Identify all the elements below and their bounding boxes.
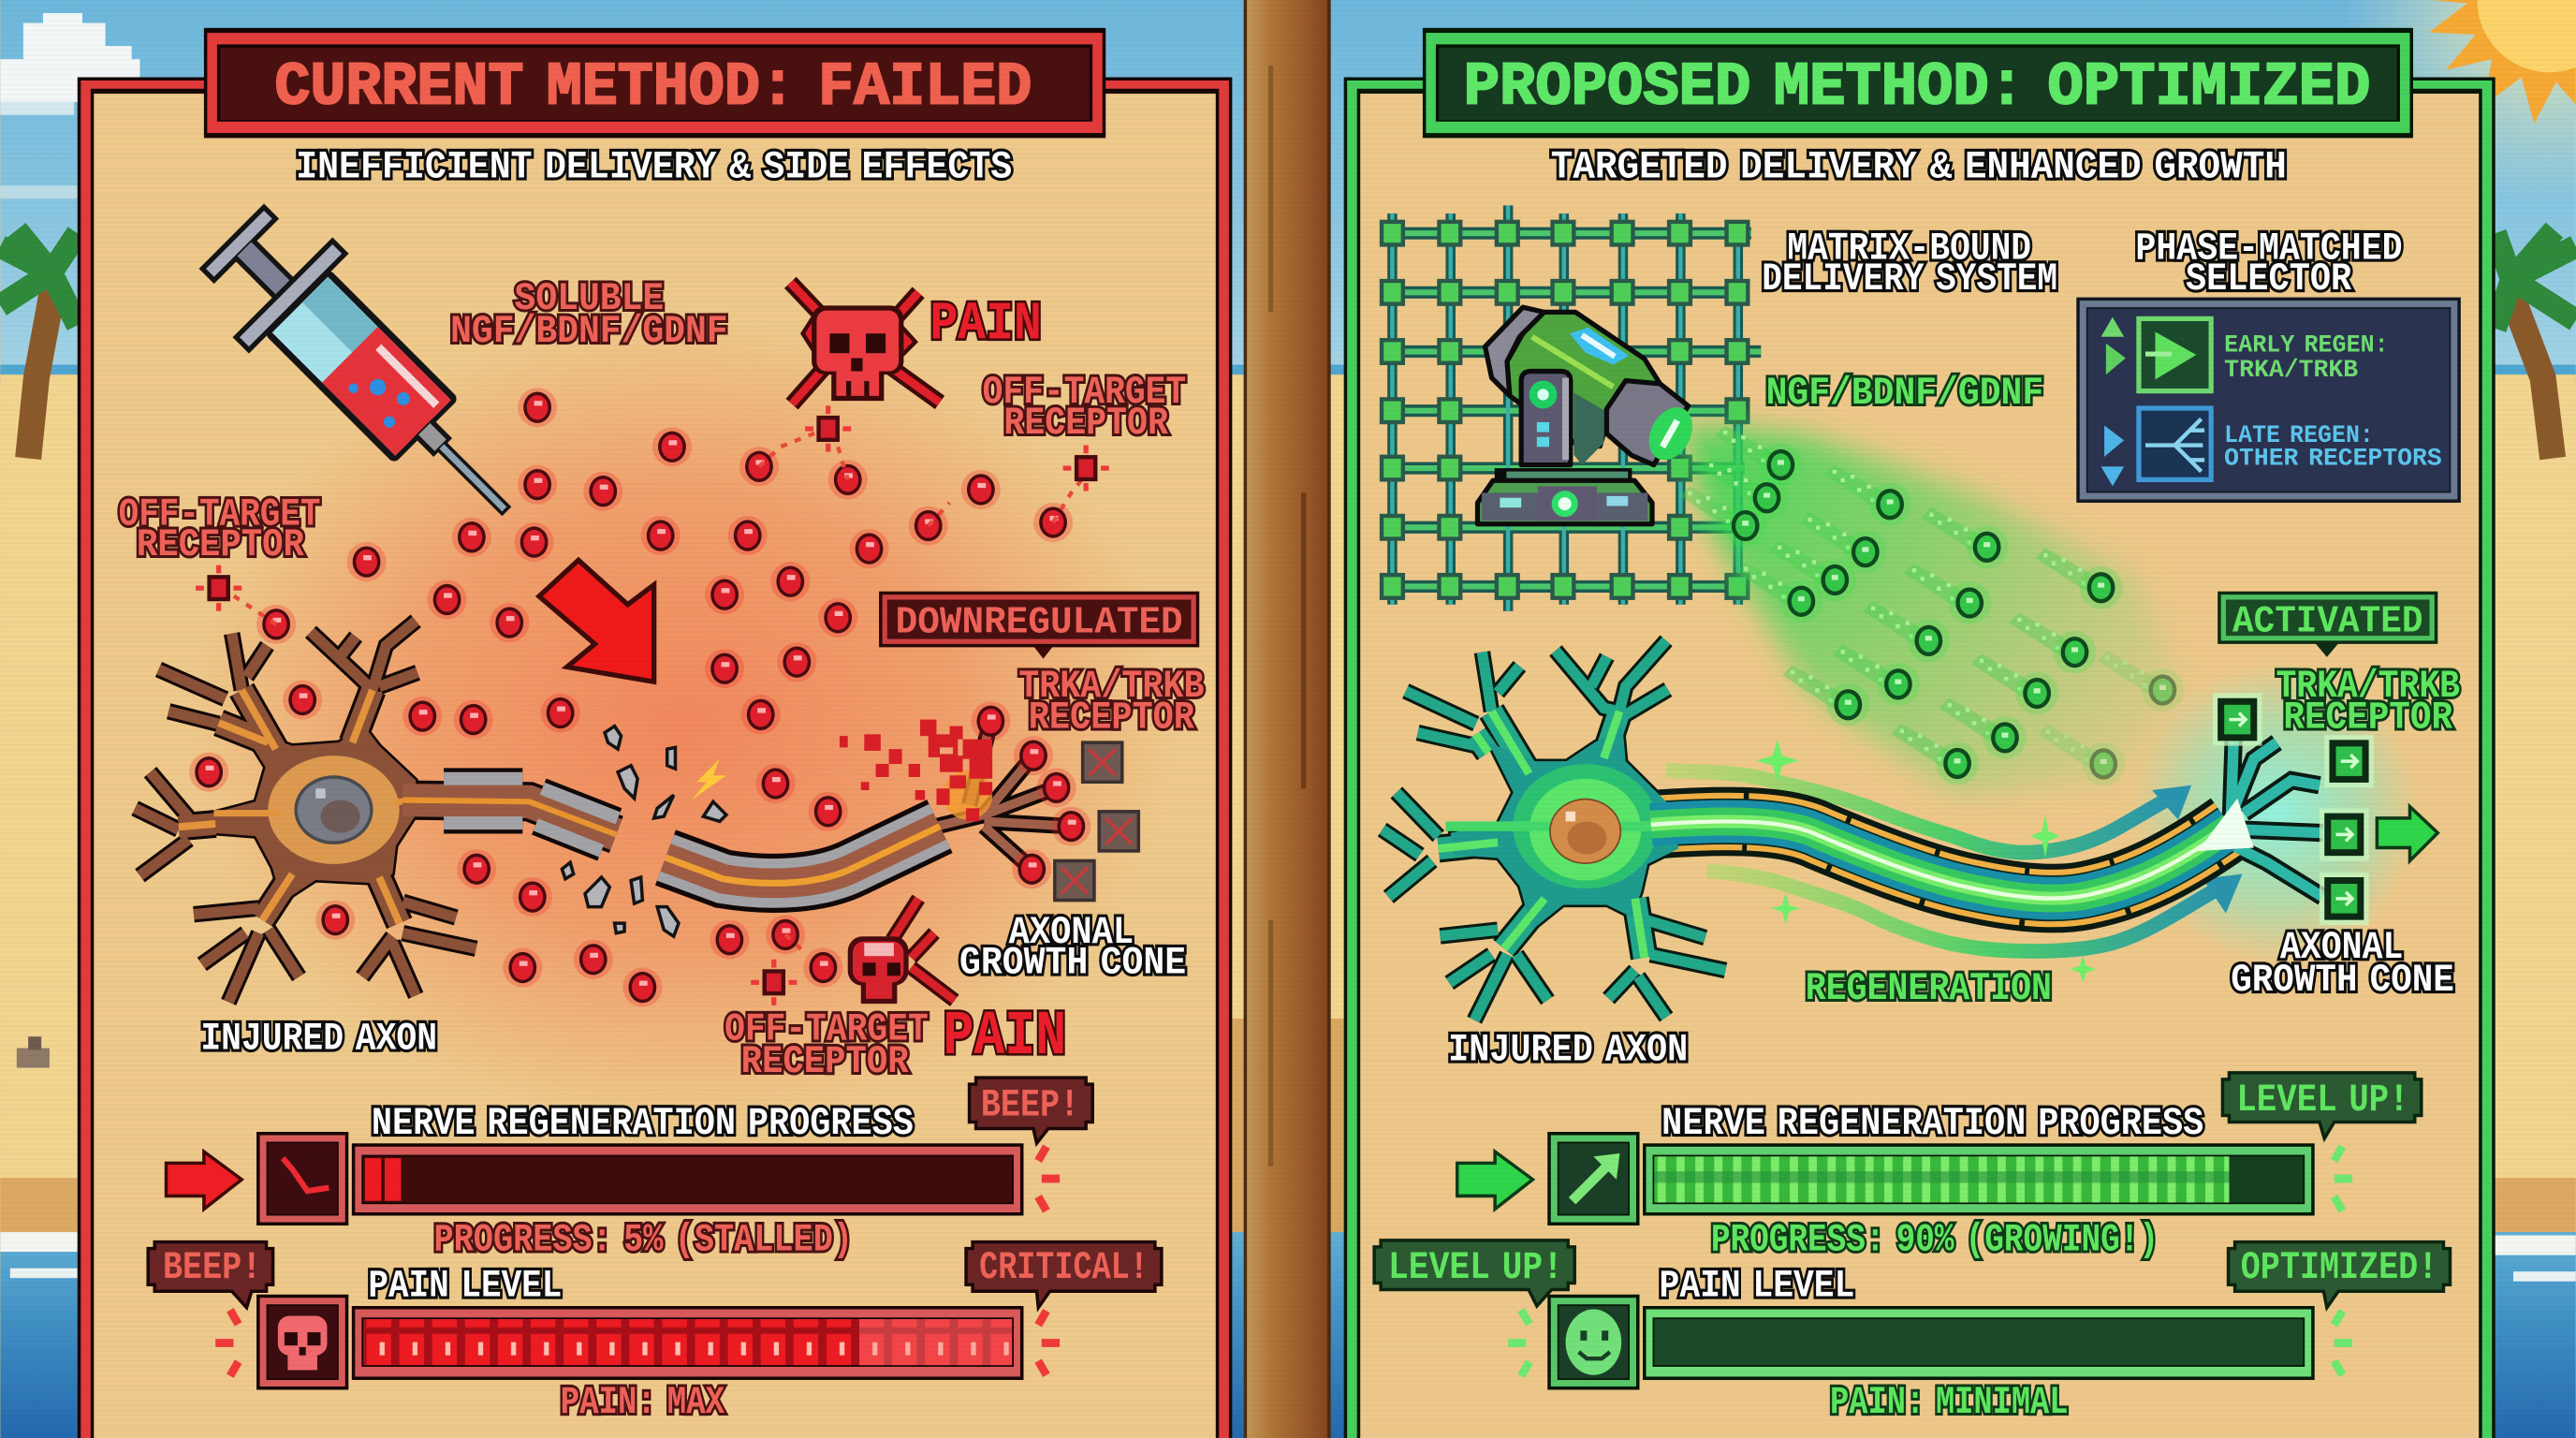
label: off-target receptor left	[119, 492, 320, 567]
cannon barrel	[1507, 312, 1660, 447]
callout: activated: ACTIVATED	[2232, 601, 2423, 644]
palm tree left	[0, 230, 78, 459]
palm tree right	[2496, 230, 2576, 459]
callout: critical	[966, 1242, 1162, 1308]
label: off-target receptor upper right: RECEPTOR	[1003, 401, 1169, 446]
callout: level up left: LEVEL UP!	[1388, 1245, 1563, 1290]
panel: current method	[78, 77, 1232, 1438]
label: off-target receptor bottom	[724, 1007, 929, 1084]
icon: syringe	[182, 186, 557, 562]
callout: level up upper: LEVEL UP!	[2236, 1078, 2409, 1123]
heading: PAIN LEVEL	[1660, 1263, 1854, 1308]
neuron: injured, left panel	[135, 621, 1071, 1002]
icon box	[1547, 1132, 1640, 1225]
label: off-target receptor upper right: OFF-TARGET	[983, 370, 1186, 415]
alert sparks progress bar	[1034, 1144, 1060, 1213]
glow at growth cone	[2130, 662, 2420, 964]
progress bar 5 percent	[352, 1143, 1023, 1215]
icon: skull with lightning	[790, 283, 940, 404]
green factor particles	[1680, 425, 2184, 785]
callout: downregulated: DOWNREGULATED	[896, 602, 1183, 645]
subtitle right: TARGETED DELIVERY & ENHANCED GROWTH	[1551, 145, 2287, 190]
status text: PAIN: MAX	[561, 1380, 725, 1425]
icon box skull	[256, 1295, 348, 1389]
matrix scaffold grid	[1380, 205, 1761, 611]
late regen control: LATE REGEN:	[2224, 421, 2374, 450]
red splatter at damaged growth cone	[840, 720, 992, 821]
icon: matrix delivery cannon	[1477, 307, 1701, 524]
off-target receptors with dashed trails	[196, 405, 1109, 1005]
icon box	[256, 1132, 348, 1225]
alert sparks pain bar	[215, 1308, 1060, 1378]
label: matrix-bound delivery system: DELIVERY SYSTEM	[1762, 257, 2057, 301]
progress section: nerve regeneration, optimized	[1457, 1101, 2315, 1262]
icon box smile	[1547, 1295, 1640, 1389]
label: trka/trkb receptor right: TRKA/TRKB	[2276, 664, 2460, 709]
activated receptors	[2213, 693, 2374, 925]
label: pain: PAIN	[929, 294, 1042, 355]
label: axonal growth cone left: AXONAL	[1009, 910, 1134, 955]
label: phase-matched selector	[2135, 227, 2403, 301]
label: axonal growth cone right	[2231, 925, 2454, 1003]
icon: lower pain skull	[848, 899, 955, 1004]
label: axonal growth cone left	[959, 910, 1186, 986]
callout: optimized	[2229, 1242, 2450, 1308]
title banner: current method failed	[204, 28, 1105, 138]
callout: beep left: BEEP!	[163, 1245, 261, 1290]
late regen control	[2101, 405, 2442, 486]
label: ngf/bdnf/gdnf green: NGF/BDNF/GDNF	[1766, 371, 2043, 416]
panel: phase-matched selector	[2076, 298, 2461, 503]
crab on the sand	[17, 1036, 50, 1068]
early regen control: TRKA/TRKB	[2224, 356, 2358, 385]
panel: proposed method	[1344, 77, 2496, 1438]
big red arrow	[539, 560, 654, 682]
sparkles along axon	[1756, 740, 2096, 982]
axon debris shards	[562, 726, 726, 936]
callout: level up left	[1374, 1240, 1574, 1306]
label: axonal growth cone left: GROWTH CONE	[959, 941, 1186, 986]
label: trka/trkb receptor right: RECEPTOR	[2283, 695, 2453, 740]
cannon nozzle	[1606, 381, 1688, 465]
callout: activated	[2217, 592, 2437, 657]
label: pain big: PAIN	[944, 1002, 1066, 1073]
neuron: regenerating, right panel	[1383, 640, 2322, 1020]
cannon column	[1521, 372, 1571, 465]
arrow	[167, 1152, 242, 1209]
pain section: optimized	[1547, 1263, 2315, 1425]
subtitle left: INEFFICIENT DELIVERY & SIDE EFFECTS	[296, 145, 1012, 190]
label: trka/trkb receptor left: RECEPTOR	[1029, 695, 1195, 740]
title text: PROPOSED METHOD: OPTIMIZED	[1464, 54, 2370, 123]
growth direction arrow	[2377, 807, 2437, 860]
callout: beep left	[148, 1242, 273, 1308]
progress section: nerve regeneration, failed	[167, 1101, 1023, 1262]
cannon base	[1477, 468, 1652, 524]
sun	[2344, 0, 2576, 205]
label: matrix-bound delivery system: MATRIX-BOUND	[1787, 227, 2031, 271]
callout: beep upper	[970, 1078, 1092, 1143]
callout: optimized: OPTIMIZED!	[2241, 1245, 2437, 1290]
label: phase-matched selector: SELECTOR	[2186, 257, 2352, 301]
label: trka/trkb receptor right	[2276, 664, 2460, 740]
label: trka/trkb receptor left	[1018, 664, 1205, 740]
label: soluble factors	[450, 276, 728, 354]
label: off-target receptor upper right	[983, 370, 1186, 446]
label: phase-matched selector: PHASE-MATCHED	[2135, 227, 2403, 271]
red gas cloud	[189, 320, 1175, 1125]
status text: PROGRESS: 5% (STALLED)	[434, 1217, 853, 1262]
label: off-target receptor bottom: RECEPTOR	[741, 1039, 909, 1084]
callout: beep upper: BEEP!	[981, 1082, 1079, 1127]
pain bar max	[352, 1306, 1023, 1380]
wooden center post	[1244, 0, 1331, 1438]
label: matrix-bound delivery system	[1762, 227, 2057, 301]
callout: downregulated	[879, 592, 1199, 659]
cannon lens	[1640, 400, 1701, 467]
label: off-target receptor bottom: OFF-TARGET	[724, 1007, 929, 1052]
spark at break	[692, 759, 726, 800]
early regen control	[2101, 316, 2389, 393]
label: regeneration: REGENERATION	[1806, 966, 2052, 1011]
late regen control: OTHER RECEPTORS	[2224, 445, 2442, 474]
callout: level up upper	[2222, 1073, 2422, 1138]
label: axonal growth cone right: AXONAL	[2280, 925, 2403, 970]
heading: NERVE REGENERATION PROGRESS	[372, 1101, 914, 1146]
arrow	[1457, 1152, 1532, 1209]
title banner: proposed method optimized	[1423, 28, 2413, 138]
inactive receptors crossed out	[1053, 741, 1140, 902]
cannon back cap	[1486, 307, 1544, 396]
label: trka/trkb receptor left: TRKA/TRKB	[1018, 664, 1205, 709]
label: off-target receptor left: OFF-TARGET	[119, 492, 320, 537]
cloud	[0, 13, 139, 115]
soluble factor particles	[189, 388, 1090, 1007]
pain section: failed	[256, 1263, 1023, 1425]
barrel detail	[1532, 328, 1629, 465]
title text: CURRENT METHOD: FAILED	[274, 54, 1032, 123]
success sparks pain bar	[1508, 1308, 2352, 1378]
pain bar minimal	[1643, 1306, 2315, 1380]
heading: NERVE REGENERATION PROGRESS	[1661, 1101, 2203, 1146]
regeneration swooshes	[1666, 770, 2221, 951]
status text: PROGRESS: 90% (GROWING!)	[1711, 1217, 2159, 1262]
label: soluble factors: NGF/BDNF/GDNF	[450, 309, 728, 354]
label: soluble factors: SOLUBLE	[515, 276, 664, 321]
label: injured axon right: INJURED AXON	[1448, 1028, 1688, 1073]
success sparks progress bar	[2331, 1144, 2352, 1213]
label: off-target receptor left: RECEPTOR	[137, 522, 305, 567]
status text: PAIN: MINIMAL	[1830, 1380, 2068, 1425]
heading: PAIN LEVEL	[368, 1263, 562, 1308]
green delivery beam	[1682, 424, 2185, 797]
progress bar 90 percent	[1643, 1143, 2315, 1215]
label: injured axon left: INJURED AXON	[200, 1016, 437, 1061]
label: axonal growth cone right: GROWTH CONE	[2231, 958, 2454, 1003]
callout: critical: CRITICAL!	[979, 1245, 1149, 1290]
swoosh arrowheads	[2152, 785, 2242, 914]
early regen control: EARLY REGEN:	[2224, 331, 2389, 360]
